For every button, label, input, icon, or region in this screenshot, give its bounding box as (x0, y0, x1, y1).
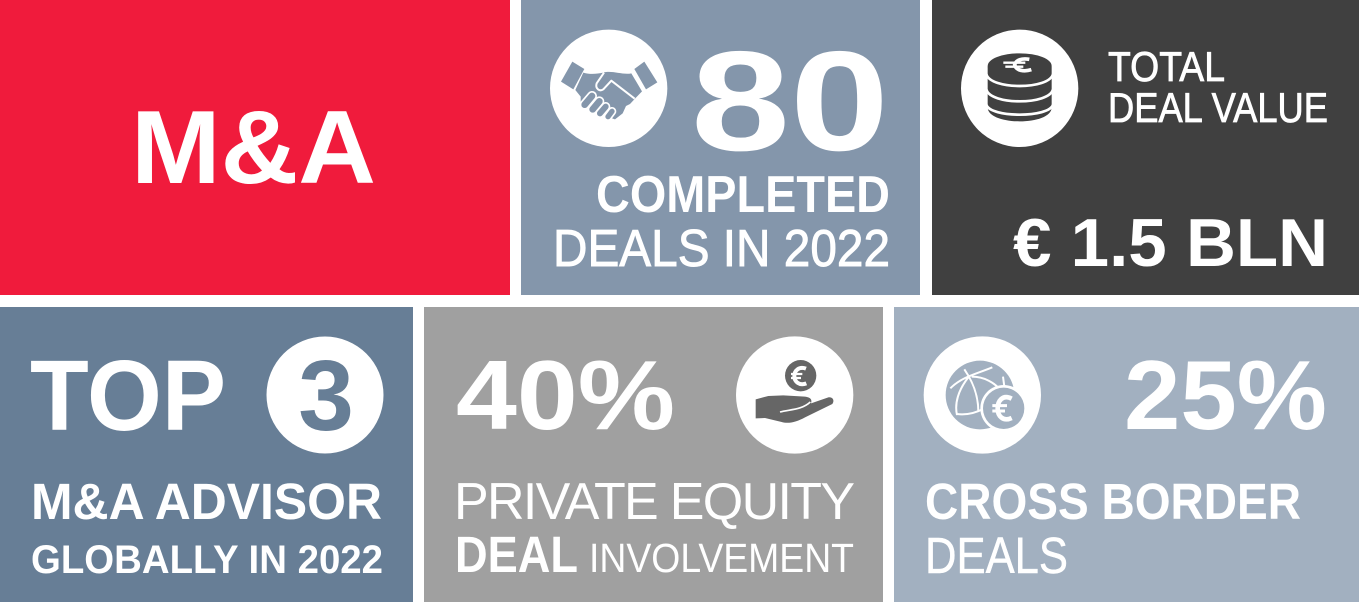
text: private equity: PRIVATE EQUITY (454, 473, 855, 531)
icon: globe with euro coin (924, 336, 1041, 454)
text: globally in 2022: GLOBALLY IN 2022 (31, 538, 383, 582)
text: top: TOP (30, 340, 226, 452)
icon: handshake (550, 30, 667, 147)
icon: number 3 badge: 3 (298, 340, 354, 452)
number: 80: 80 (691, 22, 889, 181)
number: 25%: 25% (1124, 340, 1327, 450)
text: deal: DEAL (455, 526, 578, 583)
text: involvement: INVOLVEMENT (589, 535, 854, 581)
text: deals in 2022: DEALS IN 2022 (553, 220, 890, 278)
text: total: TOTAL (1108, 43, 1225, 90)
panel: M&A title (0, 0, 510, 295)
panel: top 3 advisor (0, 307, 413, 602)
icon: number 3 badge (266, 336, 384, 454)
icon: hand with euro coin (736, 336, 853, 454)
text: deal value: DEAL VALUE (1108, 84, 1328, 131)
text: completed: COMPLETED (596, 166, 890, 224)
heading: M&A: M&A (131, 90, 376, 206)
panel: private equity (424, 307, 883, 602)
panel: total deal value (932, 0, 1359, 295)
text: deals: DEALS (925, 527, 1068, 584)
number: 1.5 billion euro: € 1.5 BLN (1013, 205, 1328, 281)
number: 40%: 40% (456, 340, 675, 450)
text: M&A advisor: M&A ADVISOR (31, 473, 382, 530)
finger capsules (585, 96, 612, 117)
panel: completed deals (521, 0, 920, 295)
panel: cross border (894, 307, 1359, 602)
text: cross border: CROSS BORDER (925, 473, 1301, 530)
icon: euro coins (961, 30, 1078, 147)
